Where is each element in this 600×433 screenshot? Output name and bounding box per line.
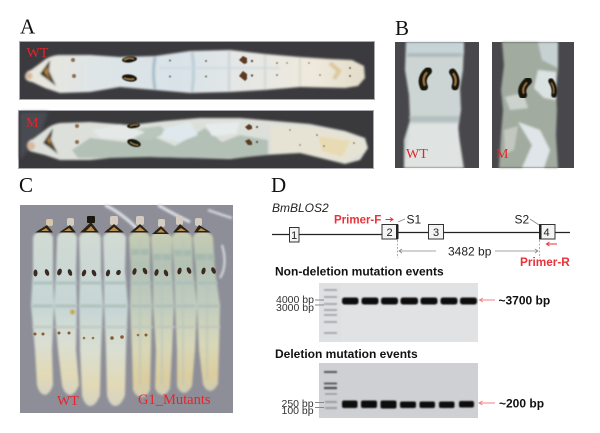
panel: D gene diagram (272, 201, 570, 269)
callout ~200 bp (479, 396, 544, 410)
panel: B mutant close-up photo (492, 42, 574, 168)
spiracles: M (522, 81, 554, 95)
label: WT: WT (26, 46, 49, 61)
panel: A mutant larva photo (18, 110, 374, 168)
marker 4000 bp: 4000 bp (276, 294, 314, 306)
larvae row (31, 231, 220, 406)
heading: panel C: C (19, 173, 33, 197)
S1 label: S1 (406, 212, 422, 226)
panel: C larvae group photo (20, 205, 233, 413)
gene line (272, 232, 570, 234)
larva body: M side view (27, 118, 368, 164)
chart: non-deletion gel (276, 283, 550, 342)
exon 2: 2 (386, 227, 393, 239)
label: M: M (26, 116, 39, 131)
ladder (324, 372, 337, 408)
larva spiracles: M (75, 123, 355, 148)
exon 3 (428, 224, 444, 239)
marker 100 bp: 100 bp (282, 405, 314, 417)
body segment: M (499, 42, 558, 168)
bands (342, 298, 477, 304)
S2 label: S2 (514, 212, 530, 226)
gene name: BmBLOS2 (272, 201, 329, 215)
callout ~200 bp: ~200 bp (499, 396, 544, 410)
larva body: WT side view (25, 50, 365, 93)
exon 2 (382, 224, 398, 239)
bands (342, 400, 474, 408)
marker 250 bp: 250 bp (282, 398, 314, 410)
larvae head caps (35, 216, 211, 234)
larvae spiracles (34, 266, 217, 340)
exon 4 (539, 224, 555, 239)
exon 1 (290, 228, 299, 242)
S2 label (514, 212, 539, 226)
label: WT: WT (406, 147, 428, 162)
larva spiracles: WT (71, 56, 351, 83)
Primer-F label and arrow: Primer-F (334, 214, 381, 226)
body segment: WT (404, 42, 464, 168)
heading: panel B: B (395, 16, 409, 40)
larvae segment shading (32, 240, 220, 385)
label: G1_Mutants: G1_Mutants (138, 392, 211, 408)
Primer-R label and arrow: Primer-R (520, 255, 570, 269)
spiracles: WT (423, 71, 456, 87)
label: M: M (496, 147, 509, 162)
S1 label (398, 212, 422, 226)
chart: deletion gel (282, 363, 544, 418)
ladder (324, 290, 337, 333)
panel: A wild-type larva photo (20, 42, 374, 100)
exon 4: 4 (543, 227, 550, 239)
heading: panel D: D (271, 173, 286, 197)
heading: non-deletion events: Non-deletion mutation events (275, 264, 444, 278)
label: WT: WT (57, 394, 79, 409)
heading: deletion events: Deletion mutation events (275, 347, 418, 361)
exon 3: 3 (433, 227, 439, 239)
Primer-R label and arrow (520, 242, 570, 269)
marker 3000 bp: 3000 bp (276, 302, 314, 314)
plastic glare (105, 205, 232, 278)
3482 bp distance marker (398, 240, 540, 258)
exon 1: 1 (291, 230, 297, 242)
panel: B wild-type close-up photo (395, 42, 479, 168)
3482 bp distance marker: 3482 bp (448, 244, 492, 258)
callout ~3700 bp: ~3700 bp (498, 294, 550, 308)
heading: panel A: A (20, 14, 36, 38)
